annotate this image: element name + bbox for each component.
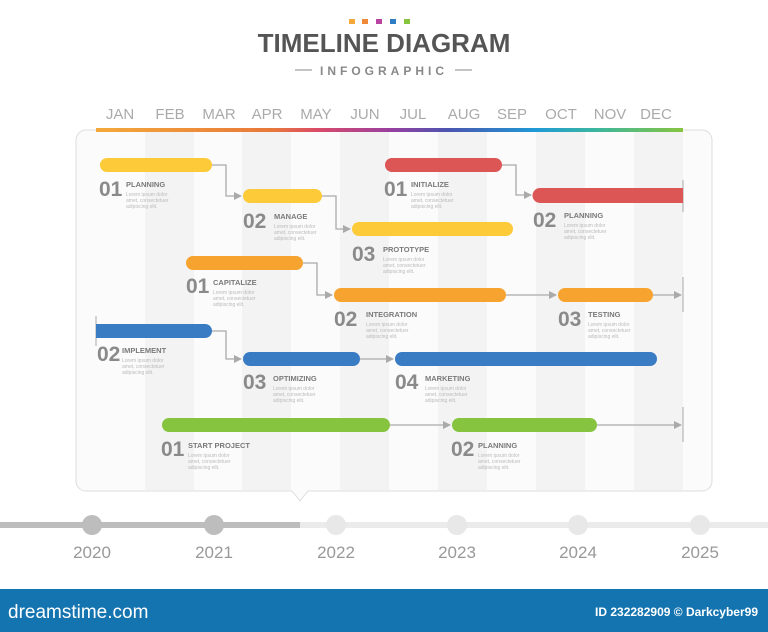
task labels: OPTIMIZING [273, 374, 317, 383]
task labels: adipiscing elit. [366, 334, 397, 340]
task labels: adipiscing elit. [188, 465, 219, 471]
task labels: PLANNING [564, 211, 603, 220]
task labels: 01 [186, 275, 210, 298]
month labels: FEB [155, 106, 185, 123]
month labels: APR [252, 106, 283, 123]
task labels: 01 [161, 438, 185, 461]
task labels: 02 [334, 308, 357, 331]
footer: ID 232282909 © Darkcyber99 [595, 605, 758, 619]
task labels: amet, consectetuer [122, 364, 165, 370]
month labels: DEC [640, 106, 672, 123]
year timeline: 2024 [559, 543, 597, 562]
footer: dreamstime.com [8, 602, 148, 623]
month labels: JAN [106, 106, 134, 123]
task labels: amet, consectetuer [213, 296, 256, 302]
month labels: JUN [350, 106, 380, 123]
year timeline: 2025 [681, 543, 719, 562]
task labels: 01 [99, 178, 123, 201]
task labels: Lorem ipsum dolor [425, 386, 467, 392]
footer [0, 589, 768, 632]
task labels: amet, consectetuer [383, 263, 426, 269]
task labels: amet, consectetuer [564, 229, 607, 235]
task labels: PROTOTYPE [383, 245, 429, 254]
month labels: AUG [448, 106, 480, 123]
task labels: amet, consectetuer [366, 328, 409, 334]
task labels: adipiscing elit. [564, 235, 595, 241]
year timeline: 2020 [73, 543, 111, 562]
task labels: adipiscing elit. [274, 236, 305, 242]
task labels: Lorem ipsum dolor [366, 322, 408, 328]
task labels: Lorem ipsum dolor [564, 223, 606, 229]
task labels: MARKETING [425, 374, 471, 383]
task labels: Lorem ipsum dolor [126, 192, 168, 198]
task labels: Lorem ipsum dolor [383, 257, 425, 263]
task labels: adipiscing elit. [411, 204, 442, 210]
task labels: adipiscing elit. [383, 269, 414, 275]
task labels: CAPITALIZE [213, 278, 257, 287]
task labels: amet, consectetuer [411, 198, 454, 204]
task labels: adipiscing elit. [126, 204, 157, 210]
task labels: Lorem ipsum dolor [213, 290, 255, 296]
task labels: 01 [384, 178, 408, 201]
task labels: amet, consectetuer [273, 392, 316, 398]
task labels: IMPLEMENT [122, 346, 167, 355]
task labels: amet, consectetuer [588, 328, 631, 334]
task labels: INITIALIZE [411, 180, 449, 189]
task labels: amet, consectetuer [274, 230, 317, 236]
task labels: adipiscing elit. [213, 302, 244, 308]
month labels: JUL [400, 106, 426, 123]
task labels: Lorem ipsum dolor [122, 358, 164, 364]
task labels: amet, consectetuer [188, 459, 231, 465]
task labels: adipiscing elit. [273, 398, 304, 404]
task labels [97, 178, 631, 471]
month labels [106, 106, 672, 123]
connectors [96, 165, 683, 442]
task labels: adipiscing elit. [122, 370, 153, 376]
task labels: INTEGRATION [366, 310, 417, 319]
panel [76, 128, 712, 501]
year timeline [0, 515, 768, 562]
month labels: MAR [202, 106, 236, 123]
year timeline: 2021 [195, 543, 233, 562]
title block: TIMELINE DIAGRAM [258, 28, 510, 58]
task labels: amet, consectetuer [478, 459, 521, 465]
task labels: Lorem ipsum dolor [273, 386, 315, 392]
month labels: SEP [497, 106, 527, 123]
task labels: amet, consectetuer [425, 392, 468, 398]
month labels: NOV [594, 106, 626, 123]
task labels: PLANNING [478, 441, 517, 450]
year timeline: 2023 [438, 543, 476, 562]
task labels: Lorem ipsum dolor [188, 453, 230, 459]
task labels: 02 [97, 343, 120, 366]
task labels: 03 [558, 308, 581, 331]
task labels: TESTING [588, 310, 621, 319]
task labels: Lorem ipsum dolor [274, 224, 316, 230]
task labels: START PROJECT [188, 441, 250, 450]
title block: INFOGRAPHIC [320, 64, 448, 78]
task labels: Lorem ipsum dolor [588, 322, 630, 328]
bars [96, 158, 683, 432]
year timeline: 2022 [317, 543, 355, 562]
task labels: adipiscing elit. [425, 398, 456, 404]
month labels: MAY [300, 106, 332, 123]
task labels: Lorem ipsum dolor [411, 192, 453, 198]
task labels: 02 [243, 210, 266, 233]
month labels: OCT [545, 106, 577, 123]
task labels: PLANNING [126, 180, 165, 189]
task labels: adipiscing elit. [588, 334, 619, 340]
task labels: 02 [451, 438, 474, 461]
task labels: 02 [533, 209, 556, 232]
task labels: Lorem ipsum dolor [478, 453, 520, 459]
task labels: amet, consectetuer [126, 198, 169, 204]
task labels: 03 [352, 243, 375, 266]
task labels: 04 [395, 371, 419, 394]
task labels: adipiscing elit. [478, 465, 509, 471]
task labels: MANAGE [274, 212, 307, 221]
task labels: 03 [243, 371, 266, 394]
title block [258, 19, 510, 78]
